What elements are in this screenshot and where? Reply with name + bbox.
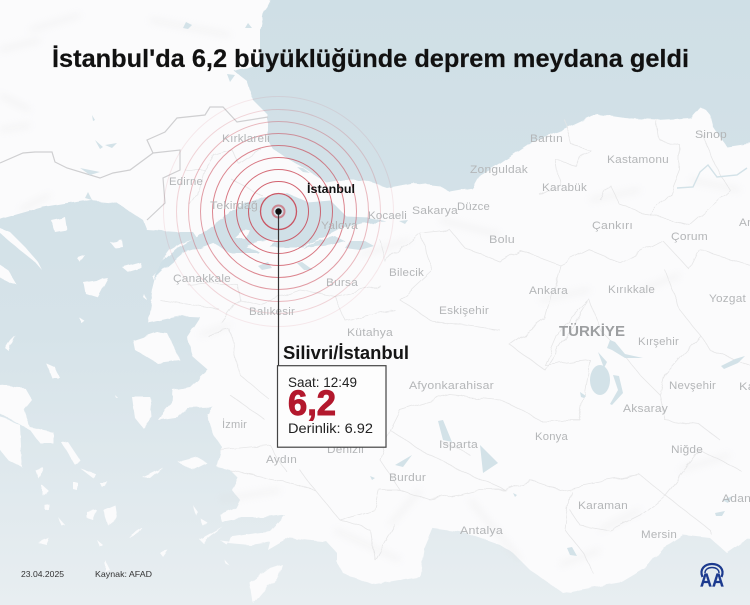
label: Çankırı: Çankırı xyxy=(592,220,633,232)
label: Kırıkkale: Kırıkkale xyxy=(608,284,655,296)
date: 23.04.2025 xyxy=(21,569,64,579)
label: İstanbul highlighted: İstanbul xyxy=(307,183,355,196)
magnitude: 6,2 xyxy=(288,384,336,423)
label: Aksaray: Aksaray xyxy=(623,403,668,415)
label: Bursa: Bursa xyxy=(326,277,359,289)
label: Eskişehir: Eskişehir xyxy=(439,305,489,317)
label: Kırklareli: Kırklareli xyxy=(222,133,270,145)
depth: Derinlik: 6.92 xyxy=(288,420,373,436)
label: Burdur: Burdur xyxy=(389,472,426,484)
label: Antalya: Antalya xyxy=(460,525,504,537)
logo: Anadolu Agency: AA xyxy=(700,570,724,590)
label: Denizli: Denizli xyxy=(327,444,364,456)
label: Aydın: Aydın xyxy=(266,454,297,466)
Marmara sea xyxy=(153,193,387,280)
label: Yozgat: Yozgat xyxy=(709,293,746,305)
label: Niğde: Niğde xyxy=(671,444,703,456)
label: Nevşehir: Nevşehir xyxy=(669,380,716,392)
label: Edirne: Edirne xyxy=(169,176,203,188)
map: lakes and rivers xyxy=(80,22,747,556)
label: Balıkesir: Balıkesir xyxy=(249,306,295,318)
label: Kastamonu: Kastamonu xyxy=(607,154,669,166)
earthquake rings xyxy=(164,96,394,326)
label: Tekirdağ: Tekirdağ xyxy=(210,200,258,212)
label: Kocaeli: Kocaeli xyxy=(368,210,407,222)
label: Kütahya: Kütahya xyxy=(347,327,394,339)
city labels xyxy=(169,129,750,541)
callout: earthquake details xyxy=(278,343,409,447)
label: Kırşehir: Kırşehir xyxy=(638,336,679,348)
callout box xyxy=(278,366,386,447)
label: Bilecik: Bilecik xyxy=(389,267,424,279)
label: Mersin: Mersin xyxy=(641,529,677,541)
label: Konya: Konya xyxy=(535,431,569,443)
epicentre marker xyxy=(275,208,282,215)
map: international borders xyxy=(0,107,268,220)
source: Kaynak: AFAD xyxy=(95,569,152,579)
label: Bolu: Bolu xyxy=(489,234,515,246)
callout leader line xyxy=(278,212,280,366)
map: province borders xyxy=(160,120,750,575)
label: Sakarya: Sakarya xyxy=(412,205,459,217)
label: Ankara: Ankara xyxy=(529,285,569,297)
label: Isparta: Isparta xyxy=(439,439,479,451)
label: Afyonkarahisar: Afyonkarahisar xyxy=(409,380,494,392)
label: Zonguldak: Zonguldak xyxy=(470,164,528,176)
label: Çanakkale: Çanakkale xyxy=(173,273,231,285)
label: Düzce: Düzce xyxy=(457,201,490,213)
label: Bartın: Bartın xyxy=(530,133,563,145)
label: İzmir: İzmir xyxy=(222,418,247,431)
label: Karaman: Karaman xyxy=(578,500,628,512)
label: Sinop: Sinop xyxy=(695,129,727,141)
time: Saat: 12:49 xyxy=(288,374,357,390)
label: Karabük: Karabük xyxy=(542,182,587,194)
map: islands xyxy=(5,217,282,603)
label: Yalova: Yalova xyxy=(321,220,359,232)
title: İstanbul'da 6,2 büyüklüğünde deprem meydana geldi xyxy=(52,45,689,73)
location heading: Silivri/İstanbul xyxy=(283,343,409,363)
country label: Türkiye: TÜRKİYE xyxy=(559,323,625,340)
label: Çorum: Çorum xyxy=(671,231,708,243)
